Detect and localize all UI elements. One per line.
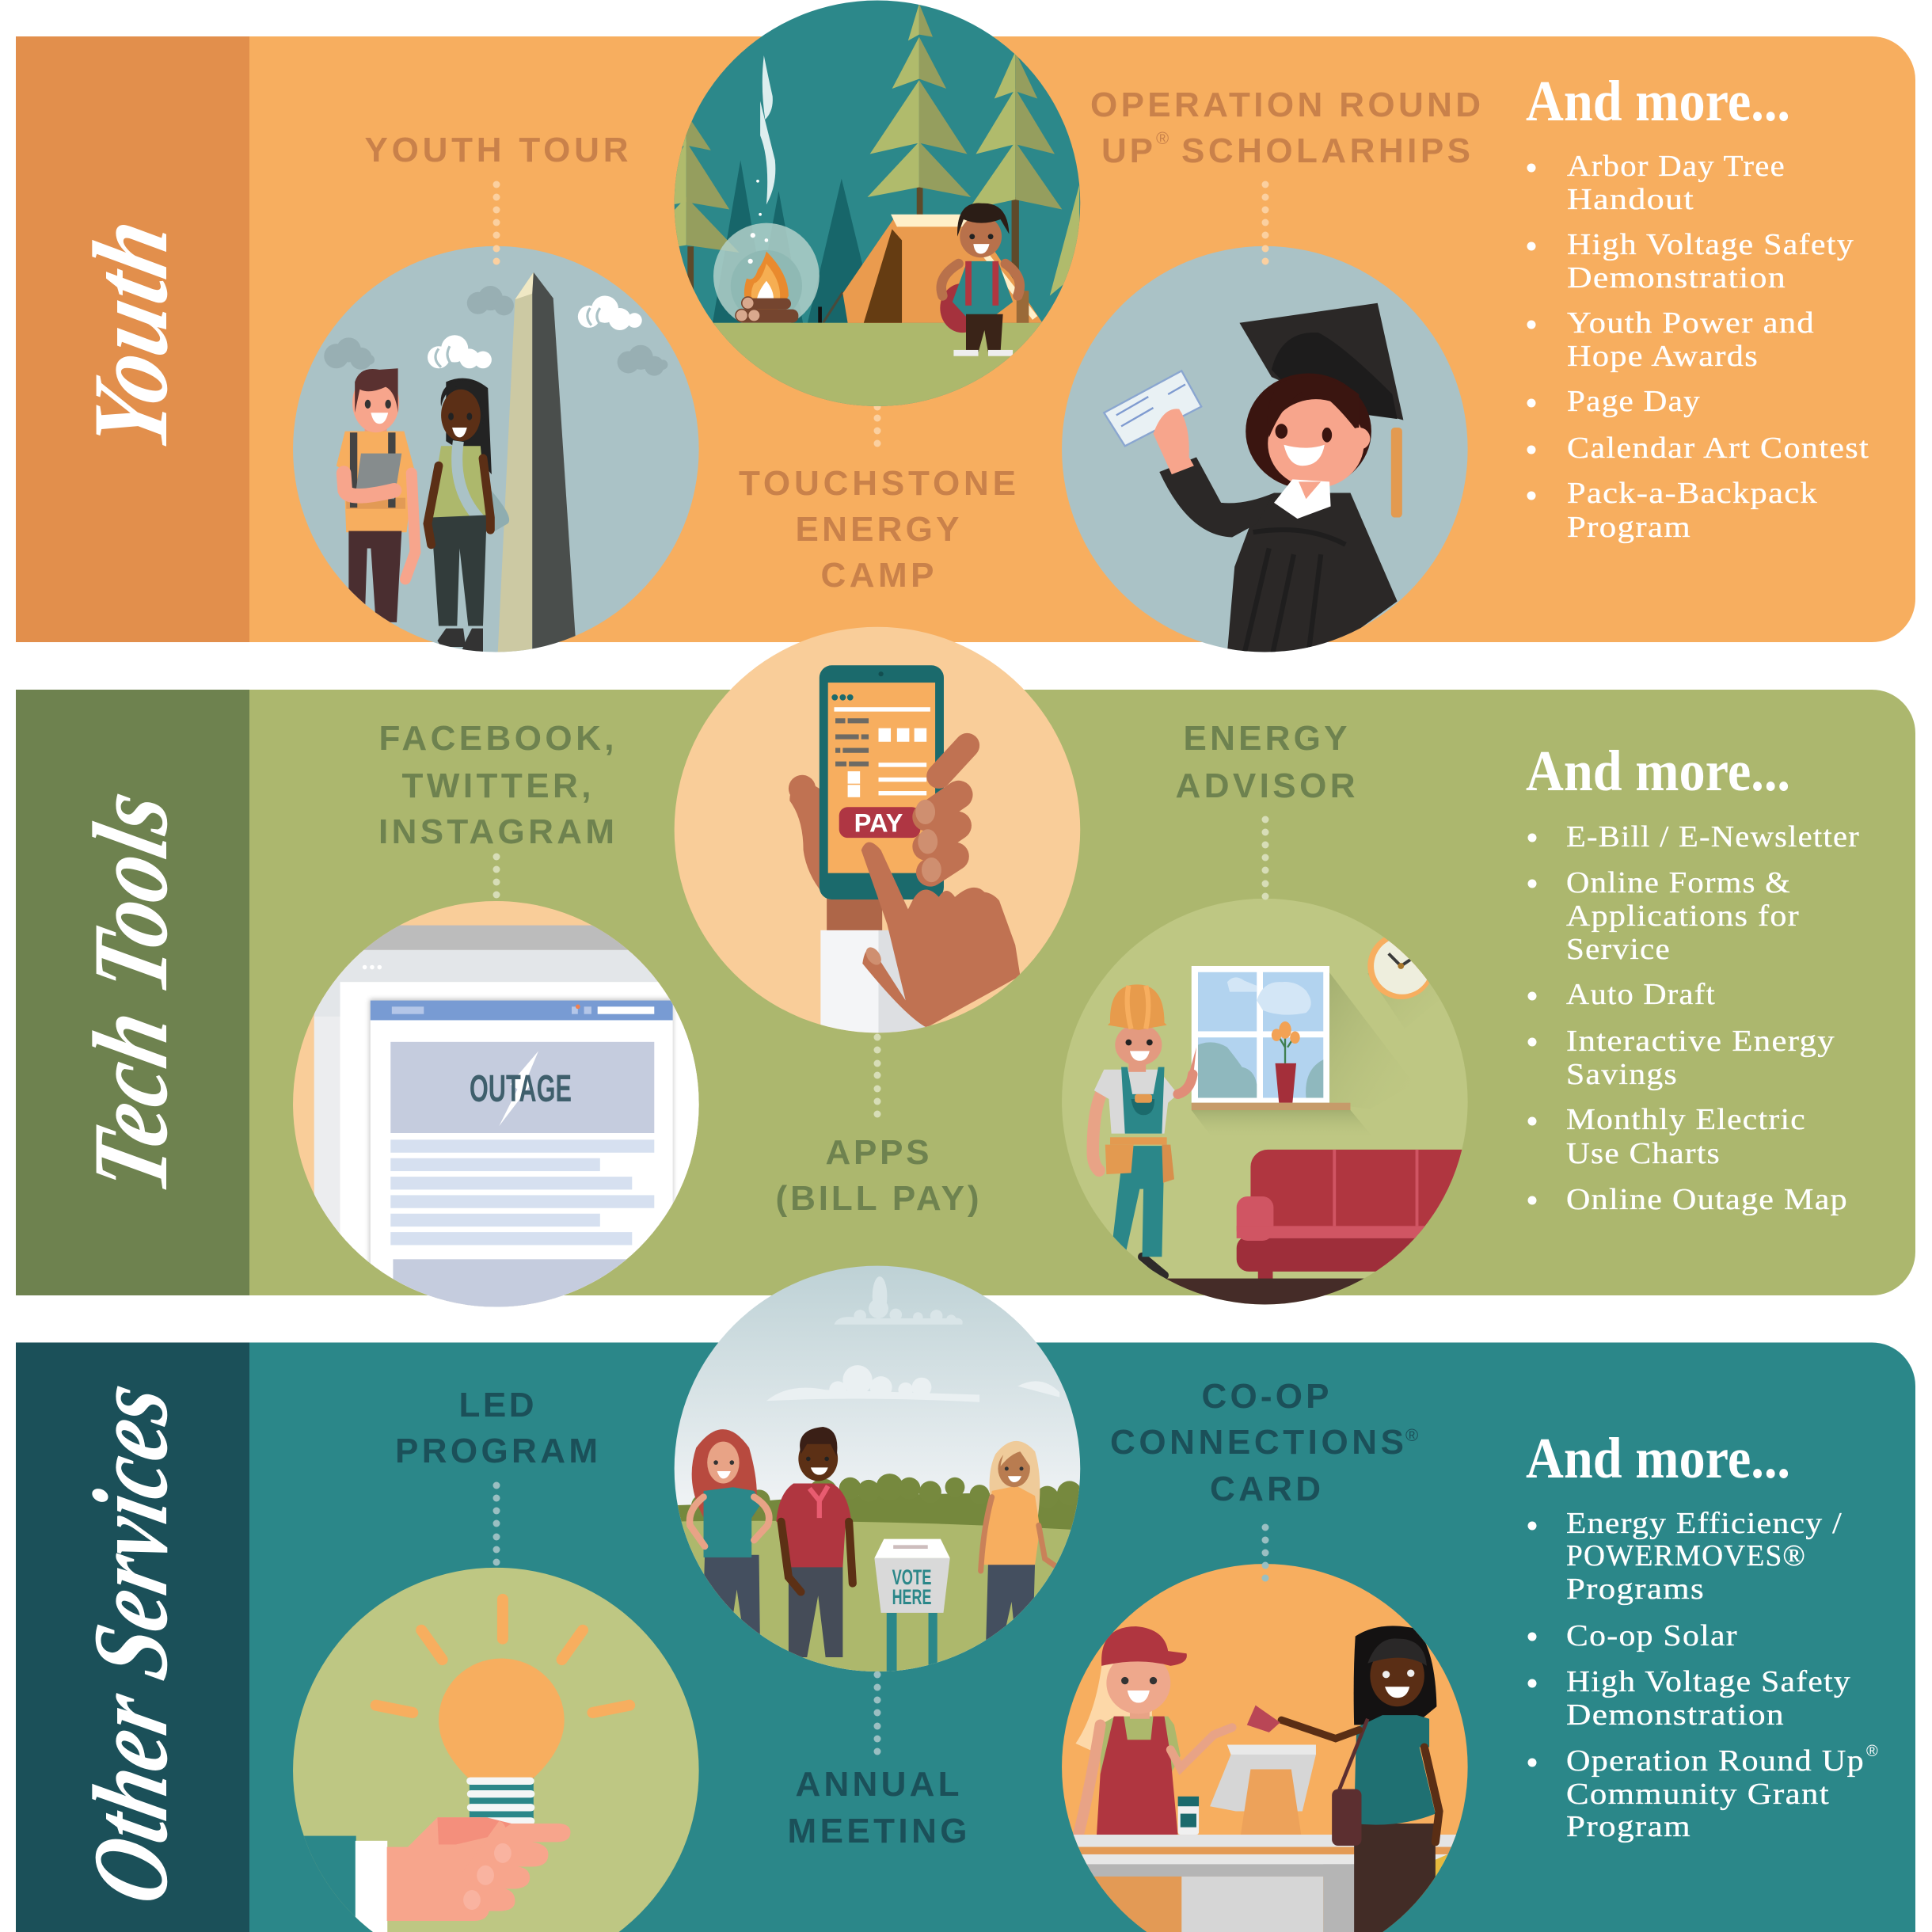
list: other extras: Community Grant — [1566, 1778, 1830, 1811]
dotted connector: youth tour — [493, 181, 500, 264]
list: tech extras: Interactive Energy — [1566, 1025, 1835, 1058]
vote here sign text: VOTE — [892, 1565, 931, 1589]
list: youth extras: Handout — [1567, 183, 1694, 216]
label: operation round up scholarships: ® — [1156, 128, 1169, 148]
list: tech extras: Applications for — [1566, 899, 1800, 933]
list: youth extras: Calendar Art Contest — [1567, 432, 1869, 465]
list: tech extras: Savings — [1566, 1058, 1678, 1091]
list: other extras: High Voltage Safety — [1566, 1665, 1851, 1698]
label: annual meeting — [787, 1765, 968, 1850]
list: youth extras: Pack-a-Backpack — [1567, 477, 1818, 510]
section title: Other Services: Other Services — [70, 1373, 190, 1913]
sidebar: youth — [16, 36, 249, 642]
illustration: vote here — [665, 1263, 1090, 1682]
label: youth tour: YOUTH TOUR — [364, 131, 629, 169]
label: energy advisor: ENERGY — [1183, 719, 1348, 758]
label: facebook twitter instagram — [378, 719, 614, 851]
list: tech extras: E-Bill / E-Newsletter — [1566, 820, 1860, 854]
vote here sign text — [892, 1565, 931, 1609]
dotted connector: touchstone — [874, 404, 880, 447]
label: co-op connections card: CO-OP — [1202, 1377, 1329, 1416]
illustration: hand holding LED bulb — [283, 1558, 709, 1932]
label: operation round up scholarships — [1090, 86, 1481, 170]
dotted connector: co-op card — [1262, 1523, 1268, 1582]
label: facebook twitter instagram: FACEBOOK, — [378, 719, 614, 758]
label: apps bill pay: (BILL PAY) — [776, 1179, 979, 1218]
label: annual meeting: ANNUAL — [795, 1765, 960, 1804]
label: co-op connections card — [1110, 1377, 1418, 1508]
illustration: youth tour at monument — [283, 234, 702, 665]
illustration: energy advisor in living room — [1053, 887, 1478, 1315]
label: operation round up scholarships: OPERATION ROUND — [1090, 86, 1481, 124]
label: operation round up scholarships: SCHOLARHIPS — [1181, 131, 1470, 170]
dotted connector: energy advisor — [1262, 816, 1268, 899]
section title: Youth: Youth — [70, 208, 190, 459]
list: youth extras: Demonstration — [1567, 261, 1786, 295]
list: other extras — [1528, 1507, 1878, 1843]
list: other extras: Operation Round Up — [1566, 1744, 1865, 1778]
list: other extras: Energy Efficiency / — [1566, 1507, 1843, 1540]
illustration: graduate with check — [1053, 234, 1478, 665]
illustration: co-op connections cashier — [1053, 1553, 1478, 1932]
list: tech extras: Auto Draft — [1566, 978, 1716, 1011]
list: youth extras: Page Day — [1567, 385, 1701, 418]
label: led program — [395, 1386, 598, 1470]
list: tech extras: Service — [1566, 933, 1671, 966]
pay button text: PAY — [854, 808, 903, 837]
list: youth extras: Program — [1567, 511, 1691, 544]
list: youth extras: High Voltage Safety — [1567, 228, 1854, 261]
list: tech extras — [1528, 820, 1860, 1216]
panel: other services — [16, 1263, 1915, 1932]
list: other extras: Co-op Solar — [1566, 1619, 1738, 1652]
dotted connector: social — [493, 854, 500, 898]
panel: youth — [16, 0, 1915, 665]
list: youth extras: Arbor Day Tree — [1567, 150, 1786, 183]
dotted connector: apps — [874, 1034, 880, 1118]
list: other extras: Programs — [1566, 1573, 1705, 1606]
label: apps bill pay: APPS — [825, 1133, 930, 1172]
list: youth extras — [1527, 150, 1869, 544]
dotted connector: scholarships — [1262, 181, 1268, 264]
list: tech extras: Monthly Electric — [1566, 1103, 1806, 1136]
outage text: OUTAGE — [470, 1067, 572, 1110]
label: touchstone energy camp — [739, 464, 1016, 595]
list: tech extras: Online Outage Map — [1566, 1183, 1848, 1216]
label: led program: PROGRAM — [395, 1432, 598, 1470]
illustration: camp — [675, 0, 1080, 406]
label: touchstone energy camp: ENERGY — [795, 510, 960, 549]
sidebar: other services — [16, 1343, 249, 1932]
label: energy advisor — [1175, 719, 1356, 805]
heading: and more: And more... — [1526, 1426, 1790, 1490]
label: led program: LED — [459, 1386, 534, 1424]
label: annual meeting: MEETING — [787, 1812, 968, 1850]
list: other extras: ® — [1866, 1743, 1878, 1760]
label: facebook twitter instagram: INSTAGRAM — [378, 812, 614, 851]
label: co-op connections card: CARD — [1210, 1470, 1321, 1508]
illustration: phone bill pay — [665, 616, 1090, 1041]
section title: Tech Tools: Tech Tools — [70, 781, 190, 1202]
list: youth extras: Hope Awards — [1567, 340, 1759, 373]
panel: tech tools — [16, 616, 1915, 1325]
dotted connector: led — [493, 1482, 500, 1566]
list: other extras: Program — [1566, 1810, 1691, 1843]
label: touchstone energy camp: TOUCHSTONE — [739, 464, 1016, 503]
label: touchstone energy camp: CAMP — [820, 556, 934, 595]
sidebar: tech tools — [16, 690, 249, 1295]
list: youth extras: Youth Power and — [1567, 306, 1815, 340]
label: energy advisor: ADVISOR — [1175, 766, 1356, 805]
list: tech extras: Use Charts — [1566, 1137, 1721, 1170]
heading: and more: And more... — [1526, 69, 1790, 133]
label: operation round up scholarships: UP — [1101, 131, 1153, 170]
list: other extras: Demonstration — [1566, 1698, 1785, 1732]
dotted connector: annual meeting — [874, 1671, 880, 1755]
heading: and more: And more... — [1526, 739, 1790, 803]
list: tech extras: Online Forms & — [1566, 866, 1791, 899]
vote here sign text: HERE — [892, 1585, 931, 1609]
label: facebook twitter instagram: TWITTER, — [402, 766, 591, 805]
illustration: outage web page — [293, 901, 699, 1306]
label: co-op connections card: CONNECTIONS — [1110, 1423, 1404, 1462]
label: co-op connections card: ® — [1405, 1425, 1418, 1445]
label: apps bill pay — [776, 1133, 979, 1218]
list: other extras: POWERMOVES® — [1566, 1539, 1806, 1573]
